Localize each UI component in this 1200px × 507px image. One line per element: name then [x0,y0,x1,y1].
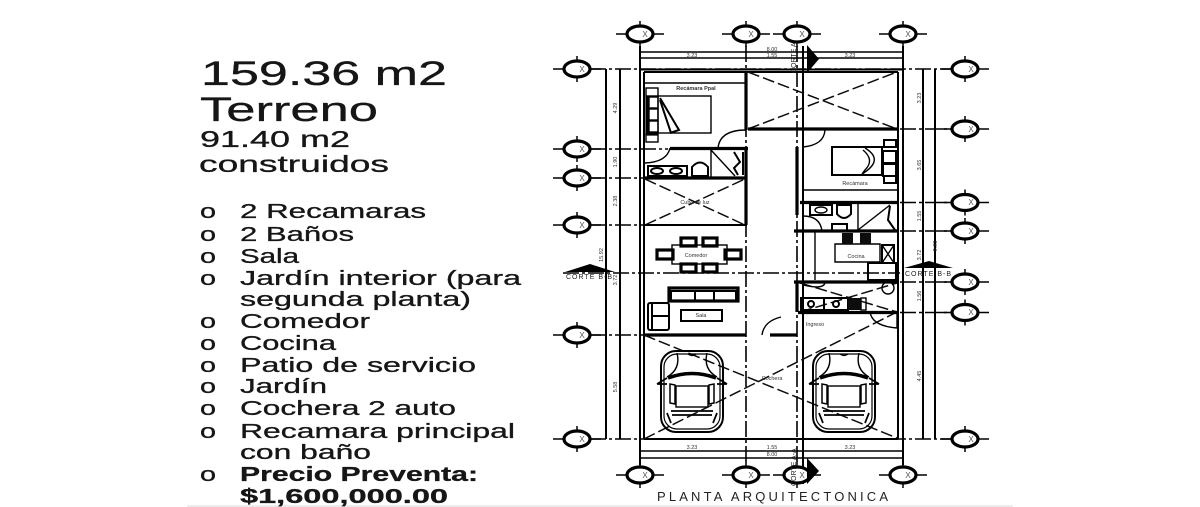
room: living: Sala [695,313,707,319]
grid bubbles: bottom: X [642,471,648,480]
exterior outline [640,70,903,439]
grid bubbles: right: X [968,227,974,236]
car left [657,351,727,432]
room: living [645,288,797,335]
section marker: top [791,35,819,73]
grid bubbles: right [941,56,989,452]
room: master bedroom: Recámara Ppal [676,86,716,92]
section marker: bottom [791,448,819,486]
section marker: top: CORTE A-A [791,35,798,73]
text block: property details [199,55,522,507]
dimension labels: 8.00 [767,452,777,458]
grid bubbles: top [616,21,927,47]
dimension labels: 4.45 [917,371,923,381]
dimension labels: 3.72 [917,250,923,260]
dimension labels: 1.56 [917,291,923,301]
room: master bedroom [644,72,748,148]
room: bedroom 2 [797,140,898,215]
room: service patio [797,282,898,328]
bed [646,88,711,142]
feature list: Patio de servicio [240,355,476,377]
car right [809,351,879,432]
heading: land area [200,55,447,129]
feature list: Comedor [240,311,371,333]
room: bedroom 2: Recámara [842,181,869,187]
grid bubbles: right: X [968,308,974,317]
dimension labels: 3.23 [687,53,697,59]
grid bubbles: right: X [968,435,974,444]
room: front garden [748,72,899,147]
dimension labels: 3.23 [845,53,855,59]
bottom edge strip [187,505,1013,507]
room: kitchen: Cocina [847,254,865,260]
grid bubbles: left: X [579,331,585,340]
grid bubbles: top: X [748,30,754,39]
grid bubbles: right: X [968,198,974,207]
feature list: o [200,224,216,246]
heading: land area: Terreno [200,91,378,129]
section marker: left [565,264,615,281]
room: light well: Cubo de luz [680,200,710,206]
section marker: right [904,261,953,278]
room: garage [644,312,897,439]
feature list: o [200,311,216,333]
room: kitchen [794,232,898,282]
feature list: Jardín interior (para [240,268,522,290]
grid bubbles: left: X [579,174,585,183]
feature list: o [200,201,216,223]
feature list: o [200,268,216,290]
grid bubbles: left: X [579,221,585,230]
room: service patio: Ingreso [806,322,824,328]
feature list [200,201,522,464]
grid and dimension lines [563,46,952,484]
feature list: 2 Baños [240,224,354,246]
feature list: Jardín [240,376,327,398]
plan title: PLANTA ARQUITECTONICA [657,489,888,504]
feature list: segunda planta) [240,289,471,311]
dimension labels: 1.90 [613,157,619,167]
grid bubbles: top: X [799,30,805,39]
dimension labels: 1.55 [917,211,923,221]
feature list: Cochera 2 auto [240,398,456,420]
room: dining: Comedor [685,253,707,259]
room: bathroom 2 [794,204,898,231]
grid bubbles: bottom: X [748,471,754,480]
section marker: right: CORTE B-B [905,271,951,278]
section marker: bottom: CORTE A-A [791,448,798,486]
subheading: built area: 91.40 m2 [200,126,350,152]
grid bubbles: left: X [579,145,585,154]
grid bubbles: top: X [905,30,911,39]
feature list: o [200,376,216,398]
dimension labels: 3.72 [613,275,619,285]
grid bubbles: right: X [968,278,974,287]
feature list: o [200,355,216,377]
feature list: Cocina [240,333,337,355]
heading: land area: 159.36 m2 [201,55,447,93]
section marker: left: CORTE B-B [566,274,612,281]
room: bathroom 1 [645,148,747,178]
room: dining [657,238,741,272]
grid bubbles: bottom: X [799,471,805,480]
room: garage: Cochera [762,376,783,382]
dimension labels [599,47,939,458]
feature list: Recamara principal [240,421,515,443]
feature list: o [200,421,216,443]
dimension labels: 3.23 [845,445,855,451]
dimension labels: 4.29 [613,103,619,113]
room: light well [644,148,747,225]
dimension labels: 3.65 [917,160,923,170]
feature list: o [200,398,216,420]
grid bubbles: top: X [642,30,648,39]
price: o [200,464,216,486]
feature list: o [200,246,216,268]
grid bubbles: right: X [968,65,974,74]
dimension labels: 1.55 [767,445,777,451]
grid bubbles: left: X [579,65,585,74]
dimension labels: 8.00 [767,47,777,53]
subheading: built area: construidos [199,151,389,177]
floor plan [553,21,989,488]
dimension labels: 15.92 [599,248,605,262]
feature list: o [200,333,216,355]
grid bubbles: bottom: X [905,471,911,480]
feature list: con baño [240,442,371,464]
dimension labels: 5.58 [613,382,619,392]
dimension labels: 3.23 [687,445,697,451]
subheading: built area [199,126,389,177]
feature list: Sala [240,246,300,268]
dimension labels: 2.38 [613,196,619,206]
grid bubbles: bottom [616,462,927,488]
dimension labels: 3.23 [917,93,923,103]
grid bubbles: right: X [968,125,974,134]
feature list: 2 Recamaras [240,201,426,223]
price: Precio Preventa: [240,464,478,486]
grid bubbles: left [553,56,601,452]
dimension labels: 1.55 [767,53,777,59]
grid bubbles: left: X [579,435,585,444]
price [200,464,478,507]
dimension labels: 9.93 [933,241,939,251]
